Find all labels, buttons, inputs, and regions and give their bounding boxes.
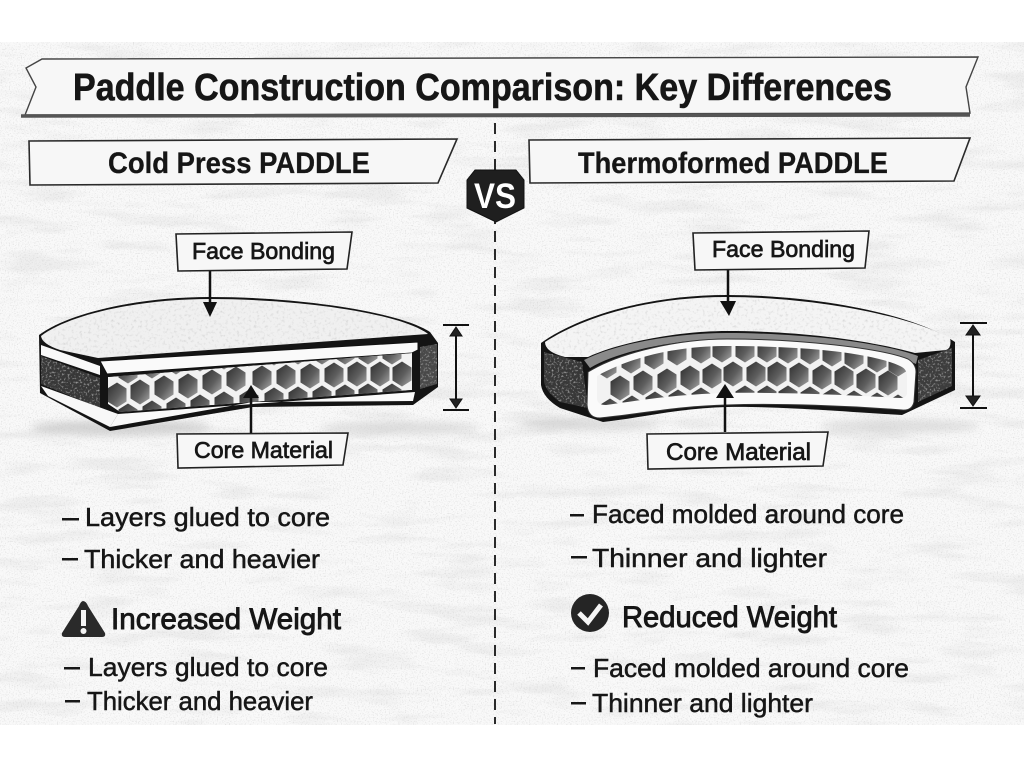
label: face bonding: Face Bonding [192,238,335,264]
text block: cold press notes: Layers glued to core [88,652,328,682]
paddle body [541,295,955,422]
text block: cold press features: Thicker and heavier [84,544,320,574]
label: core material [647,432,828,469]
text block: thermoformed notes: Faced molded around core [593,653,909,683]
arrow: thickness [960,323,987,408]
label: face bonding [176,232,352,271]
icon: warning triangle [62,601,105,637]
label: core material: Core Material [666,439,811,466]
honeycomb core [600,346,906,405]
icon: VS badge [467,170,524,222]
text block: thermoformed features: Faced molded around core [592,499,904,529]
honeycomb core [108,353,412,412]
icon: VS badge: VS [474,177,516,216]
arrow: core material [716,384,734,432]
cold press heading: Cold Press PADDLE [108,147,370,180]
center divider [494,123,496,724]
arrow: thickness [443,325,469,410]
icon: check circle [571,594,609,632]
arrow: face bonding [203,270,217,317]
label: core material: Core Material [194,437,333,463]
heading: reduced weight: Reduced Weight [622,601,838,634]
text block: thermoformed features [570,499,904,573]
label: face bonding: Face Bonding [712,236,855,262]
label: face bonding [693,231,869,270]
text block: cold press features: Layers glued to core [85,502,330,532]
panel: cold press header [29,139,457,185]
text block: cold press notes [64,652,328,716]
arrow: core material [243,385,259,433]
title banner [21,57,978,116]
panel: cold press paddle diagram [39,232,469,468]
text block: cold press features [62,502,330,574]
heading: increased weight: Increased Weight [111,603,342,636]
paddle body [39,297,438,431]
arrow: face bonding [720,270,736,316]
label: core material [177,433,348,468]
panel: thermoformed header [529,138,970,183]
text block: thermoformed notes: Thinner and lighter [592,688,813,718]
text block: thermoformed features: Thinner and lighter [592,543,827,573]
thermoformed heading: Thermoformed PADDLE [578,147,888,180]
text block: cold press notes: Thicker and heavier [87,686,313,716]
text block: thermoformed notes [571,653,909,718]
panel: thermoformed paddle diagram [541,231,987,469]
title text: Paddle Construction Comparison: Key Differences [73,67,892,109]
